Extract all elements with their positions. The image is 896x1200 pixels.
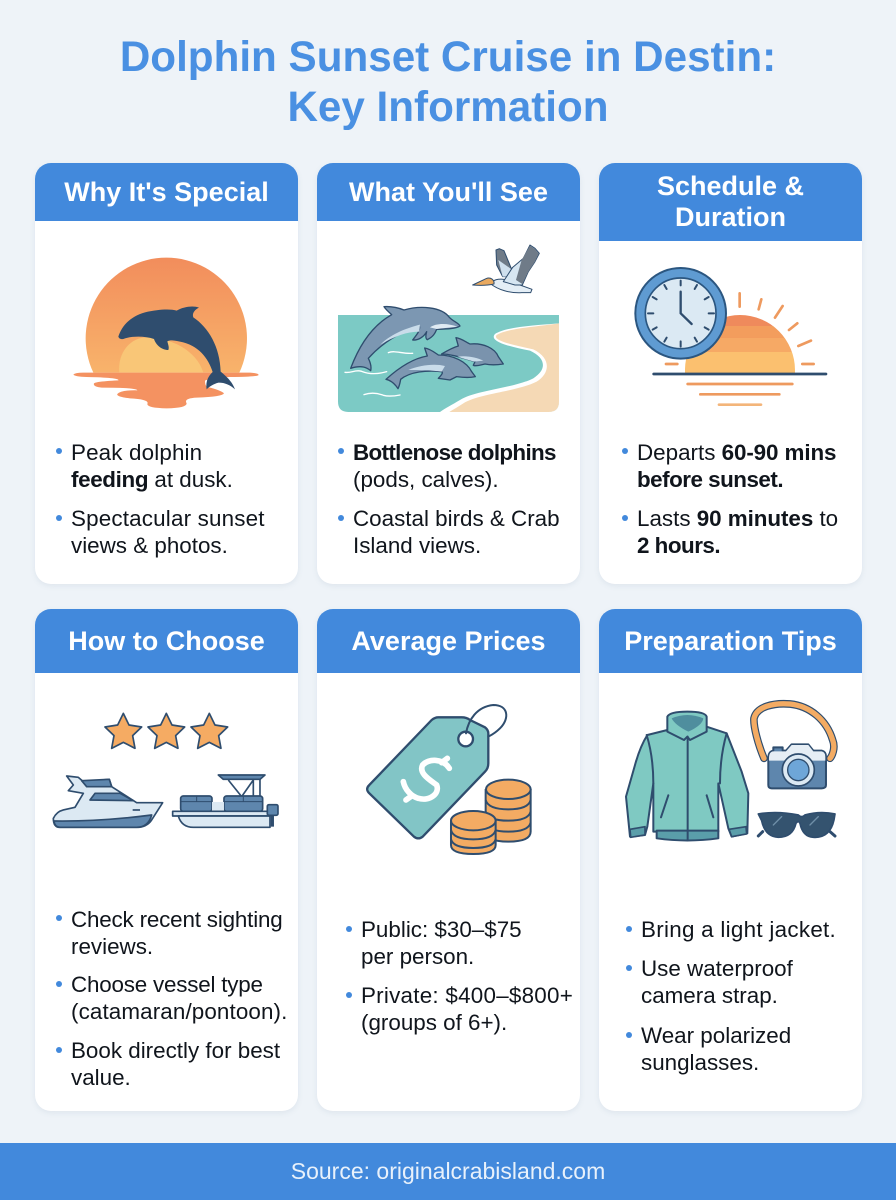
text: average prices points: (groups of 6+). [361, 1010, 507, 1035]
text: how to choose points: Check recent sighting [71, 907, 283, 932]
text: how to choose points: reviews. [71, 934, 153, 959]
text: how to choose points: Book directly for best [71, 1038, 280, 1063]
panel: preparation tips [599, 609, 862, 1111]
heading: how to choose [35, 609, 298, 673]
text: preparation tips points: camera strap. [641, 983, 778, 1008]
text: what you'll see points: (pods, calves). [353, 467, 499, 492]
heading: average prices: Average Prices [351, 626, 546, 656]
panel: what you'll see [317, 163, 580, 584]
panel: how to choose [35, 609, 298, 1111]
text: average prices points: Private: $400–$800+ [361, 983, 573, 1008]
text: schedule points: Lasts 90 minutes to [637, 506, 838, 531]
heading: schedule and duration: Schedule & [657, 171, 804, 201]
footer source bar [0, 1143, 896, 1200]
heading: why it's special [35, 163, 298, 221]
heading: what you'll see: What You'll See [349, 177, 548, 207]
heading: why it's special: Why It's Special [64, 177, 269, 207]
heading: preparation tips [599, 609, 862, 673]
text: why it's special points: views & photos. [71, 533, 228, 558]
heading: average prices [317, 609, 580, 673]
text: preparation tips points: sunglasses. [641, 1050, 759, 1075]
icon: clock and setting sun [634, 267, 828, 406]
text: preparation tips points: Wear polarized [641, 1023, 791, 1048]
text: average prices points: per person. [361, 944, 474, 969]
panel: why it's special [35, 163, 298, 584]
heading: schedule and duration: Duration [675, 202, 786, 232]
text: why it's special points: feeding at dusk. [71, 467, 233, 492]
text: how to choose points: Choose vessel type [71, 972, 263, 997]
text: preparation tips points: Bring a light jacket. [641, 917, 836, 942]
text: schedule points: before sunset. [637, 467, 783, 492]
text: schedule points: 2 hours. [637, 533, 720, 558]
title [120, 33, 776, 130]
panel: average prices [317, 609, 580, 1111]
text: schedule points: Departs 60-90 mins [637, 440, 836, 465]
heading: preparation tips: Preparation Tips [624, 626, 837, 656]
panel: schedule and duration [599, 163, 862, 584]
text: average prices points: Public: $30–$75 [361, 917, 522, 942]
text: preparation tips points: Use waterproof [641, 956, 793, 981]
title: Dolphin Sunset Cruise in Destin: [120, 33, 776, 80]
heading: what you'll see [317, 163, 580, 221]
text: how to choose points: value. [71, 1065, 131, 1090]
footer source bar: Source: originalcrabisland.com [291, 1158, 605, 1184]
text: why it's special points: Spectacular sunset [71, 506, 265, 531]
title: Key Information [287, 83, 609, 130]
text: what you'll see points: Island views. [353, 533, 481, 558]
text: what you'll see points: Coastal birds & Crab [353, 506, 560, 531]
text: what you'll see points: Bottlenose dolphins [353, 440, 556, 465]
heading: schedule and duration [599, 163, 862, 241]
text: how to choose points: (catamaran/pontoon). [71, 999, 287, 1024]
heading: how to choose: How to Choose [68, 626, 265, 656]
text: why it's special points: Peak dolphin [71, 440, 202, 465]
